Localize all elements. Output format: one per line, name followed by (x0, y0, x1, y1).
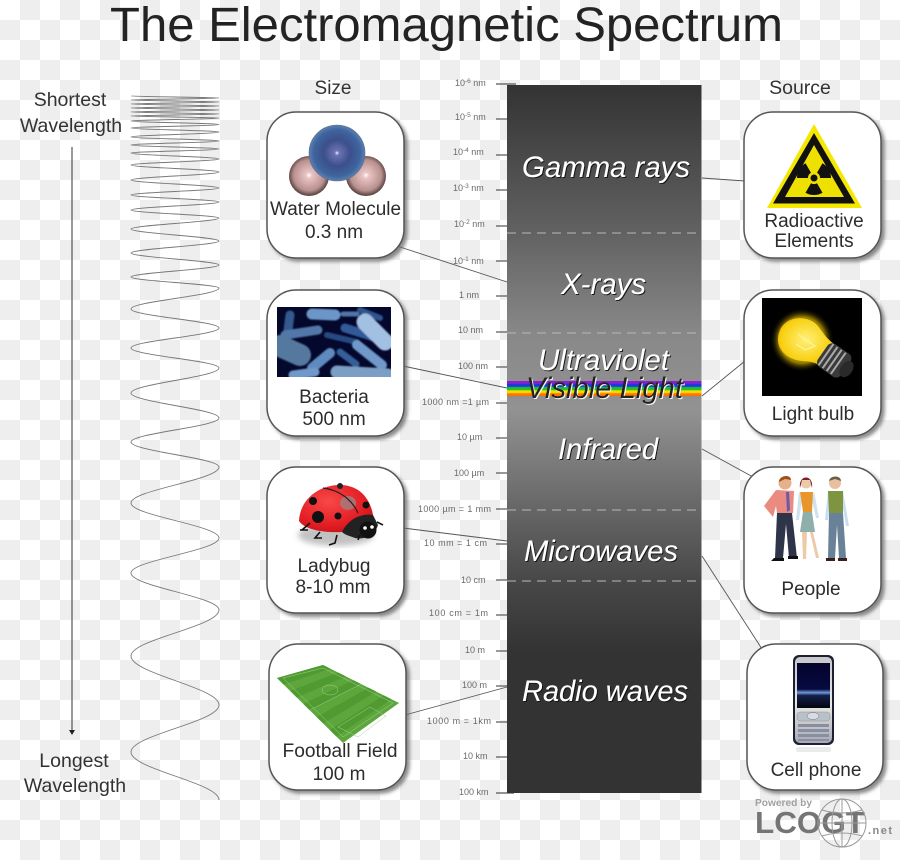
caption: football field: Football Field (282, 741, 398, 762)
caption: bacteria: 500 nm (302, 409, 366, 430)
spectrum scale labels: 10 (453, 147, 463, 157)
icon: football field (277, 665, 399, 743)
caption: radioactive elements: Radioactive (764, 211, 864, 232)
caption: radioactive elements: Elements (774, 231, 854, 252)
caption: water molecule: Water Molecule (270, 199, 401, 220)
logo: powered by LCOGT: LCOGT (755, 805, 865, 840)
spectrum scale labels: nm (471, 78, 486, 88)
caption: bacteria: Bacteria (299, 387, 369, 408)
band label: radio waves: Radio waves (522, 675, 688, 708)
band label: ultraviolet: Ultraviolet (538, 344, 671, 377)
spectrum scale labels: -4 (463, 147, 469, 154)
spectrum scale labels: 10 km (463, 751, 488, 761)
band label: visible light: Visible Light (526, 372, 685, 405)
icon: radiation warning (767, 124, 862, 208)
logo: powered by LCOGT (755, 797, 892, 847)
band label: infrared: Infrared (558, 433, 659, 466)
panel: spectrum bar (507, 85, 702, 793)
spectrum scale labels: 10 µm (457, 432, 482, 442)
spectrum scale labels: 1000 µm = 1 mm (418, 504, 491, 514)
band: visible light rainbow (507, 381, 702, 396)
spectrum scale ticks (496, 84, 516, 793)
panel: cell phone (747, 644, 883, 790)
label: longest wavelength (24, 750, 126, 797)
logo: powered by LCOGT: Powered by (755, 797, 812, 809)
icon: cell phone (793, 655, 834, 752)
spectrum scale labels: 10 (453, 183, 463, 193)
spectrum scale labels (418, 78, 491, 797)
heading: source: Source (769, 77, 831, 99)
spectrum scale labels: nm (471, 112, 486, 122)
icon: bacteria micrograph (277, 307, 391, 377)
spectrum scale labels: 1000 nm =1 µm (422, 397, 489, 407)
icon: ladybug (298, 483, 383, 546)
spectrum scale labels: -3 (463, 183, 469, 190)
caption: cell phone: Cell phone (771, 760, 861, 781)
spectrum scale labels: nm (469, 183, 484, 193)
spectrum scale labels: -6 (465, 78, 471, 85)
panel: light bulb (744, 290, 881, 436)
panel: bacteria (267, 290, 404, 436)
title: The Electromagnetic Spectrum (110, 0, 783, 52)
chart: wave of increasing wavelength (131, 96, 219, 800)
band label: x-rays: X-rays (560, 268, 646, 301)
caption: ladybug (296, 556, 370, 598)
panel: ladybug (267, 467, 404, 613)
label: shortest wavelength: Shortest (34, 89, 107, 111)
connector lines (397, 178, 762, 715)
caption: water molecule (270, 199, 401, 243)
caption: ladybug: 8-10 mm (296, 577, 370, 598)
spectrum scale labels: 100 cm = 1m (429, 608, 488, 618)
icon: three people (764, 476, 849, 561)
caption: football field: 100 m (313, 764, 365, 785)
spectrum scale labels: nm (470, 219, 485, 229)
spectrum scale labels: -1 (463, 256, 469, 263)
caption: football field (282, 741, 398, 785)
panel: football field (269, 644, 406, 790)
caption: radioactive elements (764, 211, 864, 252)
spectrum scale labels: 10 cm (461, 575, 486, 585)
spectrum scale labels: -2 (464, 219, 470, 226)
label: shortest wavelength (20, 89, 122, 137)
spectrum scale labels: 10 (454, 219, 464, 229)
band label: gamma rays: Gamma rays (522, 151, 690, 184)
spectrum scale labels: 10 (455, 78, 465, 88)
panel: people (744, 467, 881, 613)
spectrum scale labels: 10 nm (458, 325, 483, 335)
spectrum scale labels: 100 m (462, 680, 487, 690)
spectrum scale labels: 10 (453, 256, 463, 266)
caption: ladybug: Ladybug (298, 556, 370, 577)
logo: powered by LCOGT: .net (868, 825, 892, 837)
label: shortest wavelength: Wavelength (20, 115, 122, 137)
caption: bacteria (299, 387, 369, 430)
icon: water molecule (289, 125, 386, 196)
label: longest wavelength: Wavelength (24, 775, 126, 797)
spectrum scale labels: 100 km (459, 787, 489, 797)
spectrum scale labels: 100 nm (458, 361, 488, 371)
caption: people: People (781, 579, 841, 600)
spectrum scale labels: 10 mm = 1 cm (424, 538, 487, 548)
spectrum scale labels: 10 m (465, 645, 485, 655)
spectrum scale labels: 1 nm (459, 290, 479, 300)
arrow: wavelength direction (69, 147, 75, 735)
spectrum scale labels: nm (469, 256, 484, 266)
spectrum scale labels: 1000 m = 1km (427, 716, 491, 726)
caption: light bulb: Light bulb (772, 404, 854, 425)
icon: light bulb (762, 298, 862, 396)
heading: size: Size (315, 78, 351, 99)
band dividers (507, 233, 702, 581)
spectrum scale labels: -5 (465, 112, 471, 119)
panel: radioactive elements (744, 112, 881, 258)
spectrum scale labels: 10 (455, 112, 465, 122)
caption: water molecule: 0.3 nm (305, 222, 363, 243)
label: longest wavelength: Longest (39, 750, 109, 772)
spectrum scale labels: 100 µm (454, 468, 484, 478)
panel: water molecule (267, 112, 404, 258)
spectrum scale labels: nm (469, 147, 484, 157)
band label: microwaves: Microwaves (524, 535, 678, 568)
